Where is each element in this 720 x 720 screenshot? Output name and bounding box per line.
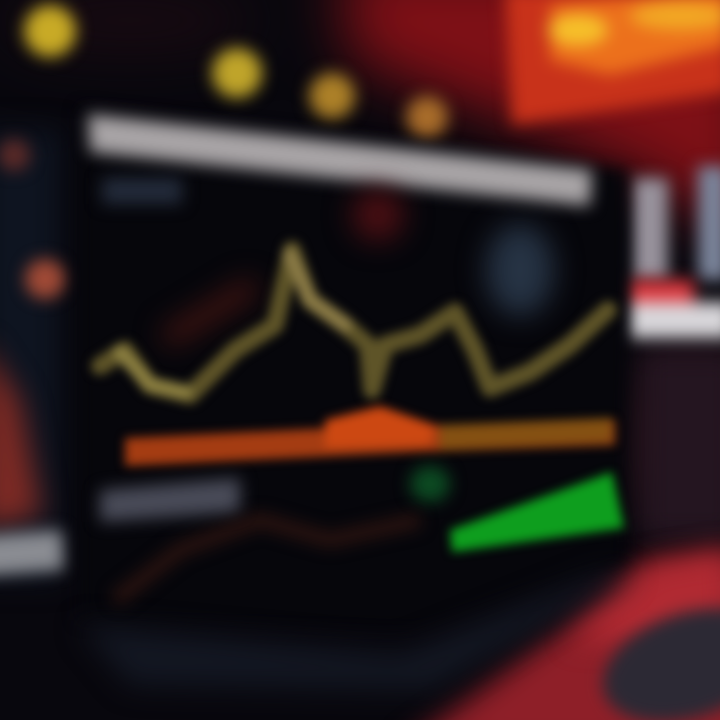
blue-grey candlestick bbox=[486, 224, 554, 316]
left side panel bbox=[0, 130, 65, 580]
monitor base shadow bbox=[80, 575, 635, 690]
small green marker bbox=[410, 466, 450, 502]
right dark lower screen bbox=[640, 350, 720, 540]
monitor bbox=[80, 108, 635, 690]
background red glow bbox=[0, 0, 720, 530]
right side panel bbox=[628, 166, 720, 540]
monitor heading bar bbox=[88, 114, 592, 206]
chart subheading bbox=[102, 178, 182, 204]
line chart bbox=[100, 250, 608, 395]
dark red chart glow bbox=[165, 189, 404, 340]
monitor body bbox=[80, 108, 628, 630]
yellow ceiling lights bbox=[24, 5, 448, 138]
lower faint chart bbox=[115, 520, 420, 600]
right red and white bar bbox=[628, 280, 720, 338]
right grey columns bbox=[632, 166, 720, 280]
left indicator lights bbox=[0, 139, 65, 299]
desk bbox=[400, 550, 720, 720]
neon sign top right bbox=[505, 0, 720, 125]
green rising area bbox=[450, 472, 624, 552]
lower label bbox=[100, 478, 240, 522]
computer mouse bbox=[588, 588, 720, 720]
red desk surface bbox=[400, 550, 720, 720]
orange volume band bbox=[125, 406, 615, 466]
left grey bar bbox=[0, 530, 64, 576]
left screen bbox=[0, 130, 60, 580]
left red chart area bbox=[0, 340, 42, 530]
